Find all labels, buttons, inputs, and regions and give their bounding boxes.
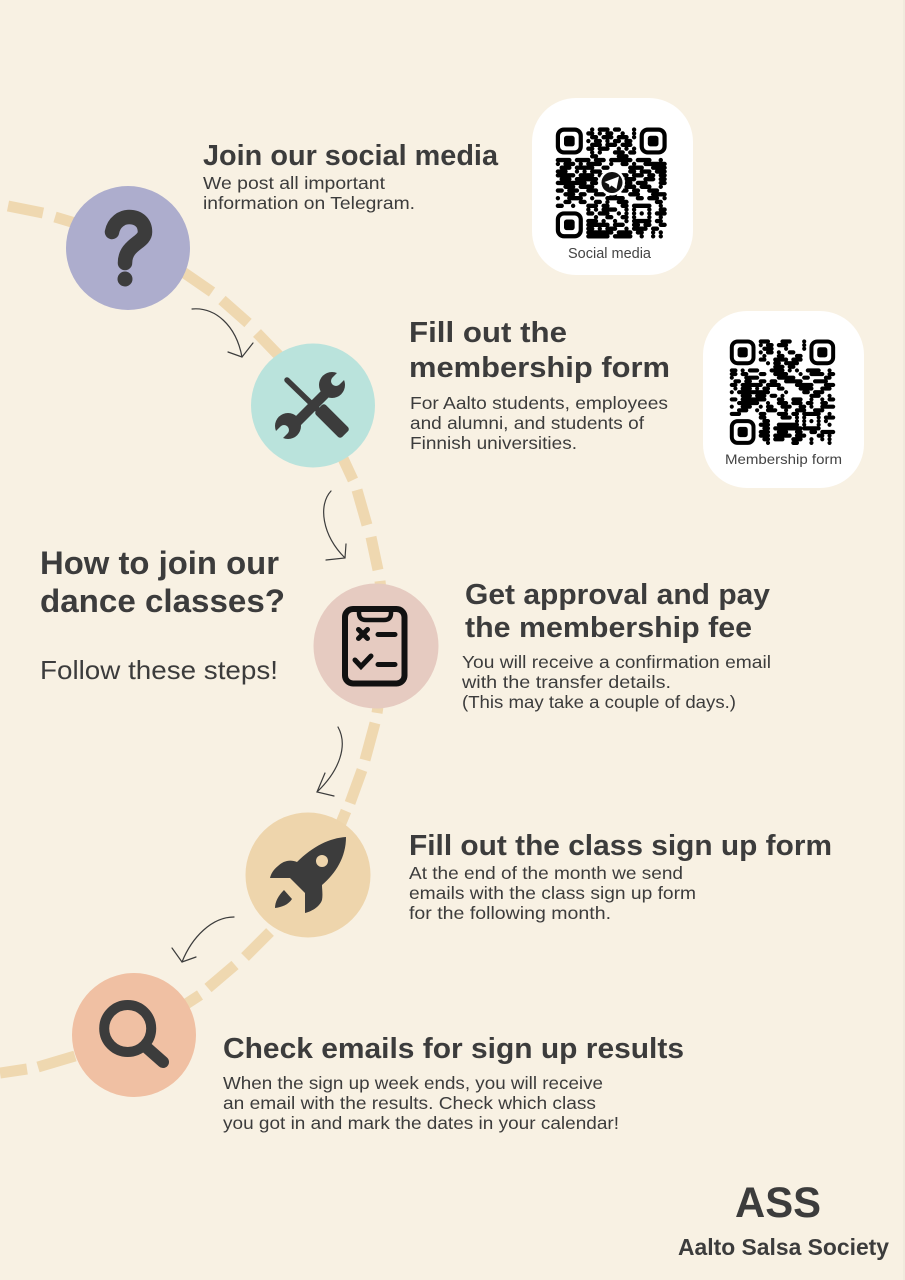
- step 2: tools circle icon: [251, 344, 375, 468]
- body: confirmation email: (This may take a couple of days.): [462, 692, 736, 712]
- body: end of month emails: emails with the class sign up form: [409, 883, 696, 903]
- QR card: membership form: [703, 311, 864, 488]
- body: results email: you got in and mark the dates in your calendar!: [223, 1113, 619, 1133]
- body: end of month emails: [409, 863, 696, 923]
- arrow 2: [324, 491, 346, 560]
- society full name: Aalto Salsa Society: [678, 1234, 889, 1260]
- heading: get approval and pay: Get approval and pay: [465, 579, 770, 611]
- subtitle: Follow these steps!: [40, 655, 278, 685]
- QR code: membership form: [732, 342, 833, 443]
- title: [40, 545, 285, 619]
- dashed path: [0, 206, 381, 1073]
- body: telegram info: We post all important: [203, 173, 385, 193]
- heading: get approval and pay: the membership fee: [465, 612, 752, 644]
- body: eligibility: For Aalto students, employees: [410, 393, 668, 413]
- body: telegram info: [203, 173, 415, 213]
- heading: join our social media: Join our social media: [203, 140, 499, 172]
- body: end of month emails: for the following month.: [409, 903, 611, 923]
- step 4: rocket circle icon: [246, 812, 370, 938]
- step 1 text: [203, 140, 499, 213]
- body: end of month emails: At the end of the month we send: [409, 863, 683, 883]
- heading: check emails: Check emails for sign up results: [223, 1033, 684, 1065]
- body: results email: an email with the results. Check which class: [223, 1093, 596, 1113]
- step 3 text: [461, 579, 771, 712]
- body: telegram info: information on Telegram.: [203, 193, 415, 213]
- logo text: ASS: [735, 1179, 821, 1227]
- title: dance classes?: [40, 583, 285, 619]
- step 5 text: [223, 1033, 684, 1133]
- body: eligibility: Finnish universities.: [410, 433, 577, 453]
- step 5: magnifier circle icon: [72, 973, 196, 1097]
- arrow 3: [317, 727, 342, 796]
- body: results email: When the sign up week ends, you will receive: [223, 1073, 603, 1093]
- QR label: social media: Social media: [568, 246, 652, 262]
- icon: telegram logo: [599, 170, 625, 196]
- body: confirmation email: with the transfer details.: [461, 672, 671, 692]
- arrow 4: [172, 917, 234, 962]
- body: eligibility: and alumni, and students of: [410, 413, 644, 433]
- title block: [40, 545, 285, 685]
- arrow 1: [192, 309, 253, 357]
- heading: fill out the membership form: Fill out the: [409, 317, 567, 349]
- title: How to join our: [40, 545, 279, 581]
- heading: class sign up form: Fill out the class sign up form: [409, 830, 832, 862]
- step 2 text: [409, 317, 670, 453]
- QR code: social media: [558, 130, 665, 236]
- heading: get approval and pay: [465, 579, 770, 644]
- body: confirmation email: [461, 652, 771, 712]
- body: results email: [223, 1073, 619, 1133]
- body: confirmation email: You will receive a confirmation email: [462, 652, 771, 672]
- footer: society name: [678, 1179, 889, 1260]
- QR label: membership form: Membership form: [725, 451, 842, 467]
- step 3: clipboard circle icon: [314, 584, 438, 708]
- step 1: question circle icon: [66, 186, 190, 310]
- heading: fill out the membership form: membership form: [409, 352, 670, 384]
- body: eligibility: [410, 393, 668, 453]
- step 4 text: [409, 830, 832, 923]
- QR card: social media: [532, 98, 693, 275]
- heading: fill out the membership form: [409, 317, 670, 384]
